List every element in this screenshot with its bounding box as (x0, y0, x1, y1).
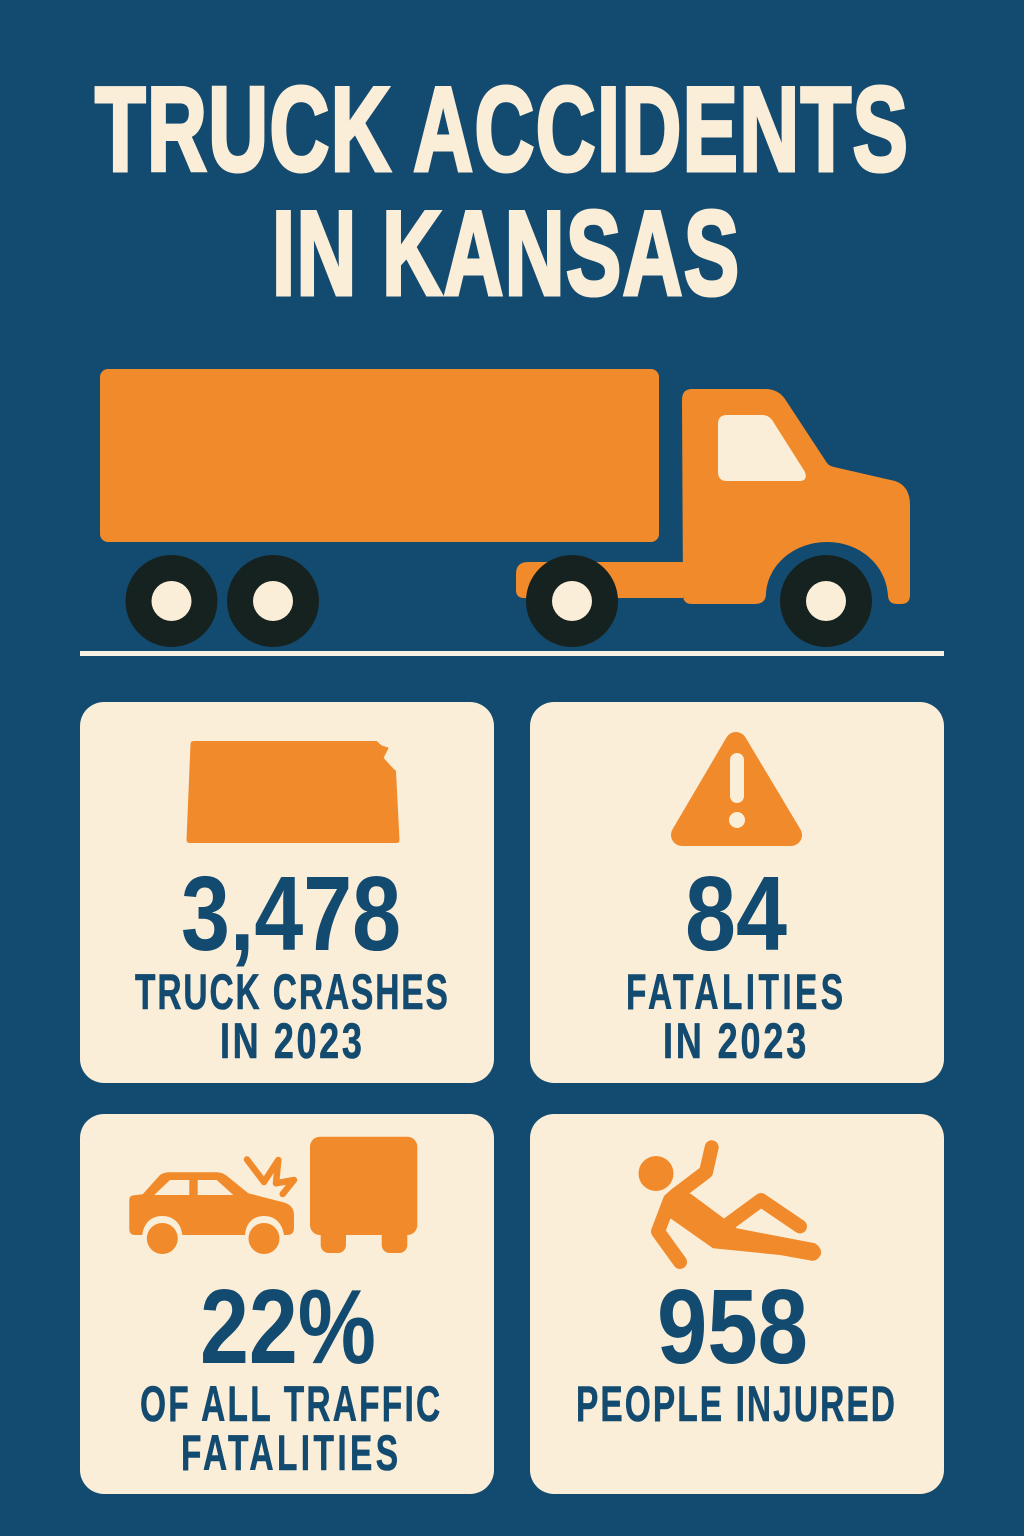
wheels (126, 555, 872, 647)
cab window (718, 415, 806, 481)
icon: warning triangle (682, 743, 791, 835)
title (95, 62, 908, 320)
title: TRUCK ACCIDENTS (95, 62, 908, 196)
label: fatalities in 2023: IN 2023 (663, 1014, 806, 1069)
label: people injured: PEOPLE INJURED (576, 1376, 895, 1433)
illustration: orange truck (100, 369, 910, 647)
icon: falling person (638, 1147, 821, 1262)
label: truck crashes in 2023: TRUCK CRASHES (135, 964, 448, 1021)
panel: truck crashes (80, 702, 494, 1083)
label: of all traffic fatalities: FATALITIES (181, 1425, 398, 1482)
panel: people injured (530, 1114, 944, 1494)
truck cargo box (100, 369, 659, 542)
label: truck crashes in 2023: IN 2023 (220, 1014, 362, 1069)
panel: fatalities (530, 702, 944, 1083)
label: truck crashes in 2023 (135, 964, 448, 1069)
car body (129, 1172, 294, 1235)
crash spark (247, 1160, 294, 1194)
truck chassis frame (516, 562, 683, 598)
road line (80, 651, 944, 656)
label: of all traffic fatalities: OF ALL TRAFFIC (140, 1376, 440, 1433)
panel: share of traffic fatalities (80, 1114, 494, 1494)
label: fatalities in 2023 (626, 964, 843, 1069)
label: of all traffic fatalities (140, 1376, 440, 1482)
stat: 22%: 22% (200, 1268, 376, 1386)
title: IN KANSAS (272, 186, 739, 320)
car wheels (147, 1223, 178, 1254)
stat: 84: 84 (685, 855, 787, 973)
label: fatalities in 2023: FATALITIES (626, 964, 843, 1021)
stat: 3,478: 3,478 (181, 855, 401, 973)
truck rear (310, 1137, 417, 1235)
truck cab (682, 389, 910, 604)
icon: car hitting truck (129, 1137, 417, 1254)
stat: 958: 958 (657, 1268, 808, 1386)
icon: Kansas map (187, 742, 399, 842)
car windows (154, 1180, 189, 1195)
